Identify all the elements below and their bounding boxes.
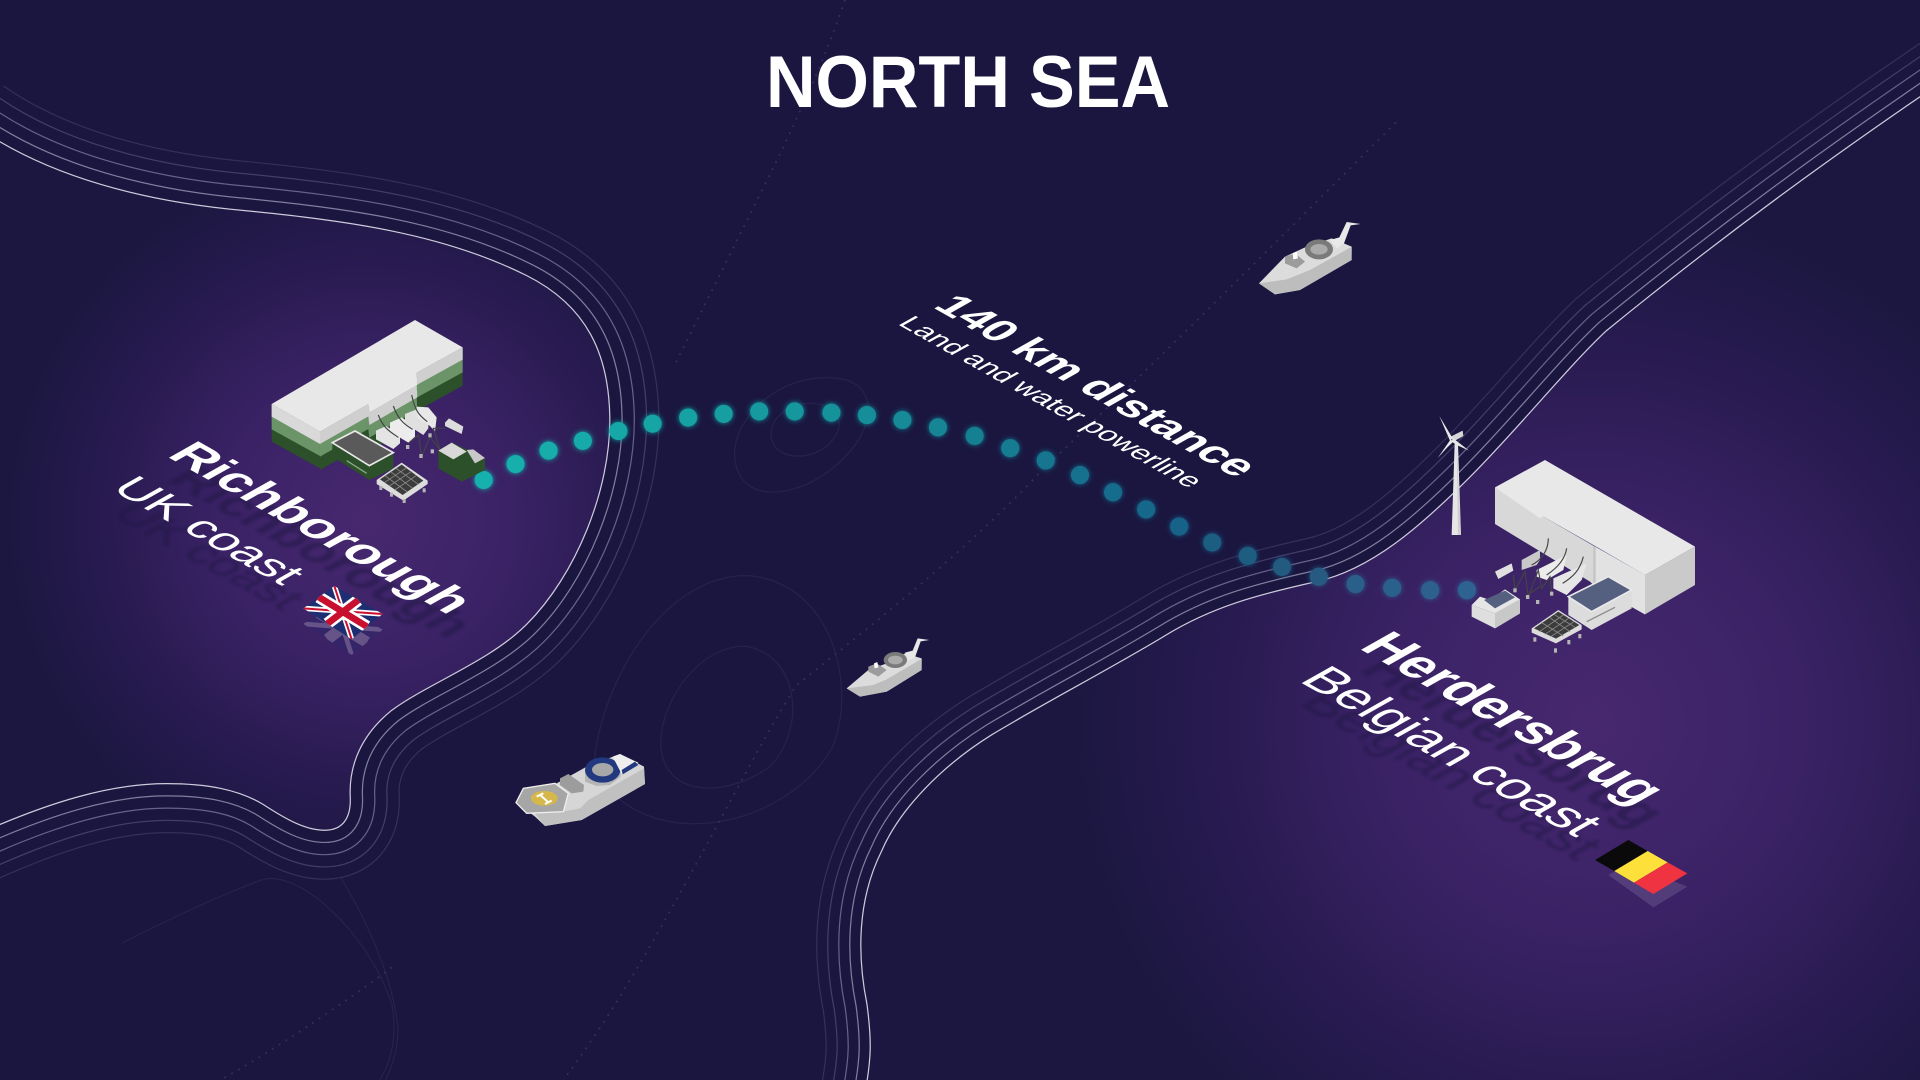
Richborough converter station bbox=[272, 320, 485, 503]
Richborough label shadow: UK coast bbox=[102, 494, 317, 616]
cooling box bbox=[1472, 589, 1520, 628]
ship with helipad bbox=[516, 754, 645, 826]
UK coastline contours bbox=[0, 126, 610, 835]
Belgian coastline contours bbox=[861, 78, 1920, 1080]
powerline dots bbox=[475, 402, 1476, 599]
control box bbox=[332, 431, 393, 480]
Herdersbrug label shadow: Herdersbrug bbox=[1348, 647, 1681, 835]
solar array bbox=[1532, 610, 1582, 653]
cooling box bbox=[438, 443, 485, 482]
small ship centre bbox=[847, 638, 929, 697]
powerline label: Land and water powerline bbox=[891, 312, 1210, 492]
UK land bbox=[0, 126, 610, 835]
dotted seabed lines bbox=[220, 0, 1396, 1080]
faint seabed contours bbox=[122, 378, 868, 1080]
converter units bbox=[1495, 538, 1587, 604]
Belgian coast label: Belgian coast bbox=[1289, 659, 1616, 843]
Belgian land bbox=[861, 78, 1920, 1080]
Herdersbrug converter station bbox=[1472, 460, 1695, 653]
title: NORTH SEA bbox=[766, 42, 1170, 123]
converter units bbox=[376, 395, 463, 458]
small ship top right bbox=[1259, 222, 1361, 294]
Richborough label shadow: Richborough bbox=[157, 458, 487, 644]
distance label: 140 km distance bbox=[923, 289, 1269, 483]
icon: Belgian flag bbox=[1595, 840, 1687, 907]
icon: UK flag bbox=[304, 586, 382, 655]
Herdersbrug label shadow: Belgian coast bbox=[1289, 682, 1616, 866]
solar array bbox=[377, 463, 428, 503]
Herdersbrug label: Herdersbrug bbox=[1348, 624, 1681, 812]
UK coast label: UK coast bbox=[102, 469, 317, 591]
control box bbox=[1568, 577, 1632, 630]
Richborough label: Richborough bbox=[157, 434, 487, 620]
icon: wind turbine bbox=[1438, 416, 1469, 535]
